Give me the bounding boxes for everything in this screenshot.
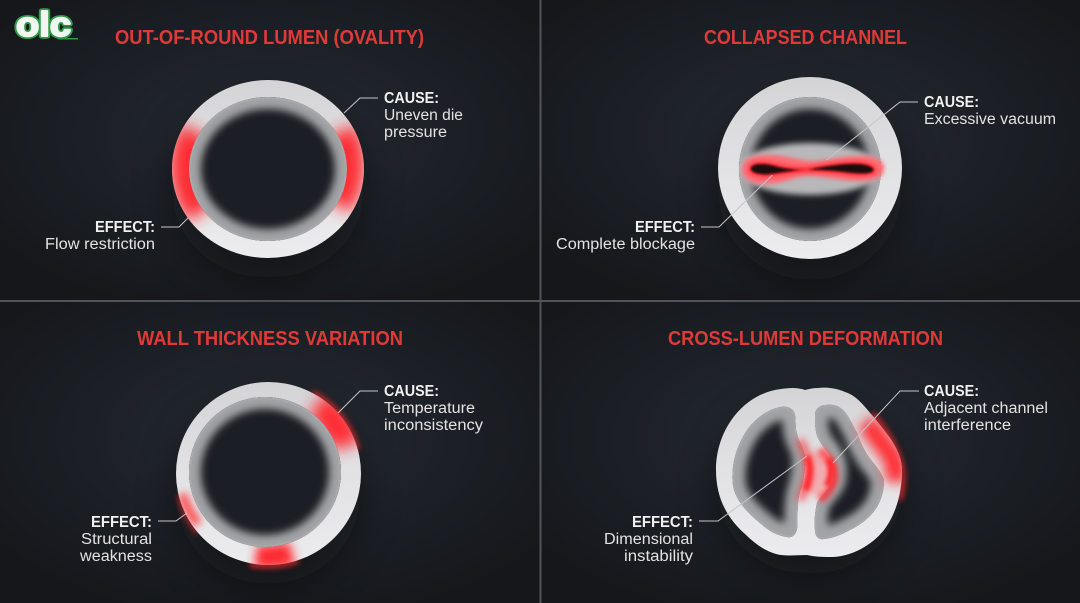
label: cause: interference	[924, 417, 1011, 434]
label: effect	[604, 514, 693, 565]
label: cause	[924, 94, 1056, 128]
title: ovality: OUT-OF-ROUND LUMEN (OVALITY)	[115, 27, 424, 49]
label: effect: EFFECT:	[95, 219, 155, 236]
panel: ovality	[45, 27, 463, 278]
title: collapsed: COLLAPSED CHANNEL	[704, 27, 907, 49]
label: effect: EFFECT:	[635, 219, 695, 236]
label: effect	[556, 219, 695, 253]
tube: uneven wall ring	[176, 382, 361, 584]
leader: cause	[826, 102, 918, 160]
label: cause	[924, 383, 1048, 434]
tube: ovality ring	[172, 80, 364, 278]
label: cause: CAUSE:	[384, 90, 439, 107]
label: effect: Structural	[81, 531, 152, 548]
leader: effect	[701, 175, 772, 227]
deformation highlights	[799, 422, 896, 500]
panel: wall thickness	[79, 328, 483, 584]
leader: cause	[344, 98, 378, 113]
panel: collapsed channel	[556, 27, 1056, 280]
tube: two-lumen profile	[716, 388, 902, 574]
leader: effect	[699, 456, 807, 521]
label: cause: Excessive vacuum	[924, 111, 1056, 128]
label: effect: EFFECT:	[632, 514, 693, 531]
label: cause: Temperature	[384, 400, 475, 417]
label: cause: CAUSE:	[924, 383, 979, 400]
label: cause: pressure	[384, 124, 447, 141]
label: effect: Flow restriction	[45, 236, 155, 253]
label: cause: CAUSE:	[924, 94, 979, 111]
leader: effect	[161, 218, 188, 227]
tube: collapsed ring	[718, 77, 902, 280]
leader: cause	[833, 391, 919, 463]
leader: effect	[158, 513, 187, 521]
label: effect: instability	[624, 548, 693, 565]
label: effect: Dimensional	[604, 531, 693, 548]
label: cause: Adjacent channel	[924, 400, 1048, 417]
label: effect: Complete blockage	[556, 236, 695, 253]
label: cause	[384, 383, 483, 434]
label: effect: EFFECT:	[91, 514, 152, 531]
panel: cross-lumen	[604, 328, 1048, 574]
label: cause: inconsistency	[384, 417, 483, 434]
lumen: left	[732, 406, 806, 538]
label: effect	[45, 219, 155, 253]
label: cause: CAUSE:	[384, 383, 439, 400]
collapse highlight	[742, 155, 884, 184]
logo: olc	[16, 6, 71, 44]
title: cross-lumen: CROSS-LUMEN DEFORMATION	[668, 328, 943, 350]
lumen: right	[814, 404, 884, 540]
label: cause	[384, 90, 463, 141]
title: wall thickness: WALL THICKNESS VARIATION	[137, 328, 403, 350]
label: effect	[79, 514, 152, 565]
leader: cause	[338, 391, 378, 413]
label: cause: Uneven die	[384, 107, 463, 124]
label: effect: weakness	[79, 548, 152, 565]
logo: olc	[16, 6, 71, 44]
